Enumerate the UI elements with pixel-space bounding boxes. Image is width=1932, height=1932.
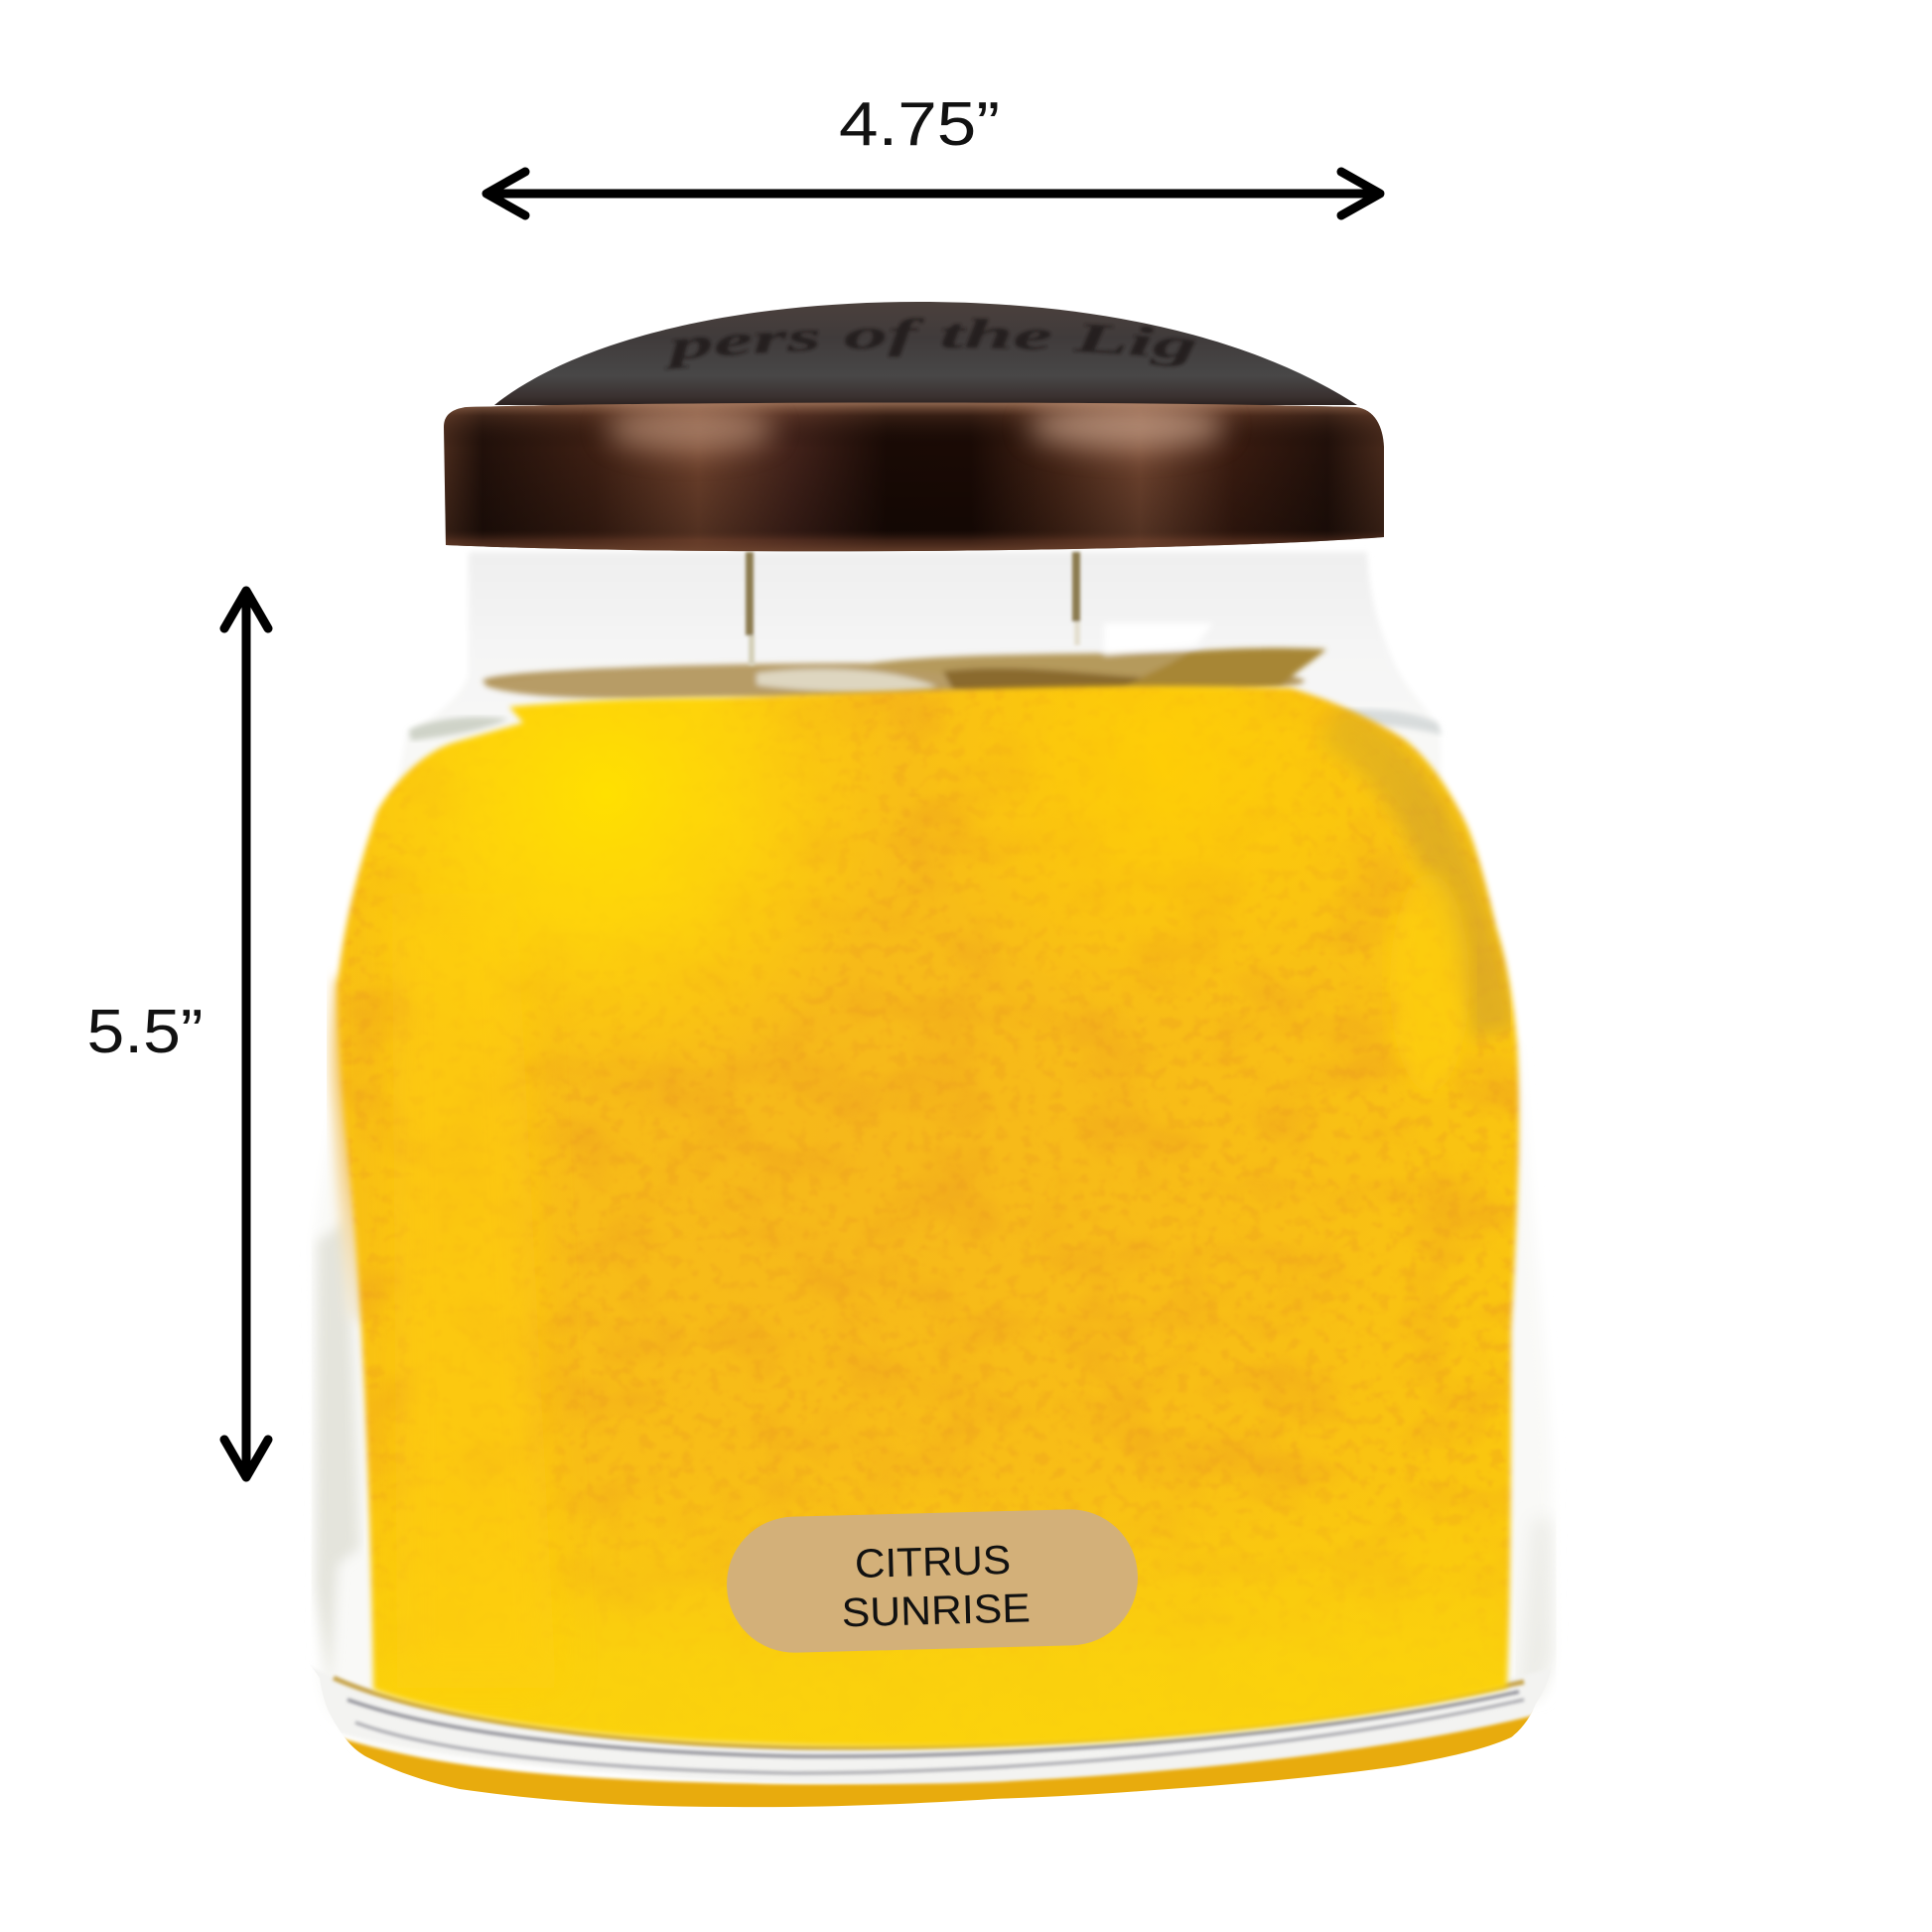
right shoulder lip — [1330, 709, 1442, 735]
pale melted wax — [757, 669, 937, 692]
infographic canvas — [89, 102, 1557, 1807]
embossed lid lettering: pers of the Lig — [665, 317, 1195, 371]
lid dome — [494, 302, 1357, 405]
wicks — [750, 552, 1077, 665]
rim shading — [444, 403, 1384, 551]
wax top surface — [483, 623, 1326, 699]
height label: 5.5” — [87, 998, 203, 1066]
rim highlights — [606, 405, 1226, 451]
pale wax edge — [331, 978, 369, 1320]
tan wax strip — [858, 651, 1191, 675]
wax underlay — [483, 663, 1305, 699]
lid — [444, 302, 1384, 552]
width arrow — [486, 172, 1380, 215]
orange wax base under glass — [344, 1710, 1533, 1807]
base of jar — [314, 1669, 1536, 1807]
yellow wax body — [334, 682, 1524, 1752]
olive wax right — [1122, 648, 1326, 689]
clear base band — [314, 1669, 1536, 1787]
glass highlight — [1104, 623, 1213, 655]
label name: CITRUS — [854, 1537, 1012, 1587]
label sticker — [725, 1508, 1140, 1654]
tan wax left — [483, 665, 993, 699]
label name: SUNRISE — [841, 1585, 1031, 1635]
left shoulder lip — [409, 717, 508, 741]
label name — [840, 1536, 1031, 1635]
ring lines — [334, 1678, 1524, 1773]
lid rim — [444, 403, 1384, 551]
product label — [725, 1508, 1140, 1654]
dark wax — [943, 668, 1181, 694]
candle jar — [270, 302, 1557, 1807]
right glass wall — [1519, 1519, 1553, 1696]
left glass wall — [316, 1221, 359, 1688]
width label: 4.75” — [839, 90, 1000, 159]
height arrow — [224, 591, 268, 1477]
glass lower body — [314, 1042, 1554, 1777]
glass neck and shoulder — [397, 552, 1442, 784]
